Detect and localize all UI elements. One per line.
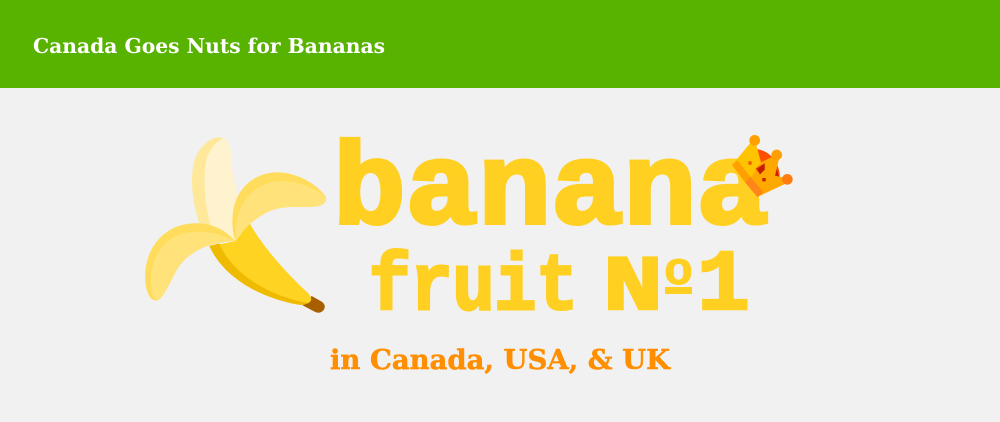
tagline: in Canada, USA, & UK <box>330 345 672 376</box>
subheading: fruit No. 1: o <box>664 246 693 298</box>
icon: crown <box>732 135 793 197</box>
heading: banana: banana <box>333 126 769 258</box>
subheading: fruit No. 1: fruit <box>369 243 578 334</box>
subheading: fruit No. 1: 1 <box>697 237 750 335</box>
header bar <box>0 0 1000 88</box>
title: Canada Goes Nuts for Bananas <box>33 34 385 58</box>
subheading: fruit No. 1 <box>369 237 750 335</box>
subheading: fruit No. 1: N <box>603 245 663 333</box>
icon: peeled banana <box>145 137 326 313</box>
